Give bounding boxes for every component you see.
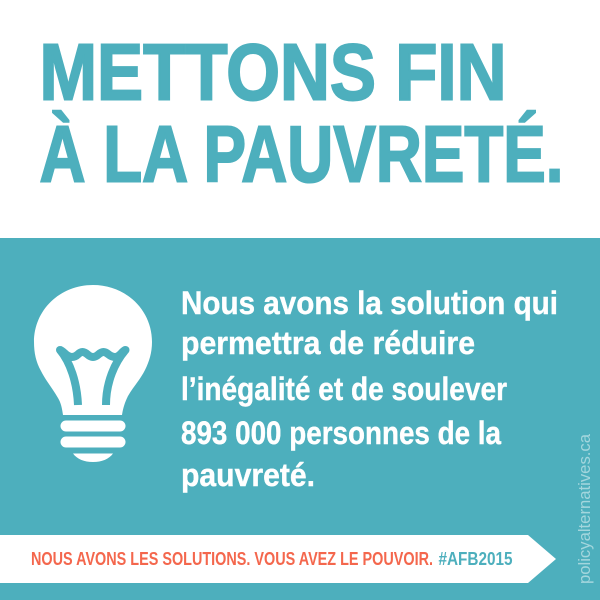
- panel: white header background: [0, 0, 600, 238]
- title: METTONS FIN: [40, 28, 506, 116]
- text block: main message: [181, 285, 558, 493]
- banner hashtag: #AFB2015: [438, 548, 512, 569]
- text block: main message: permettra de réduire: [181, 325, 475, 361]
- panel: teal body background: [0, 238, 600, 600]
- title: [40, 28, 564, 198]
- text block: main message: 893 000 personnes de la: [181, 415, 501, 451]
- banner text: NOUS AVONS LES SOLUTIONS. VOUS AVEZ LE POUVOIR.: [31, 548, 433, 569]
- text block: main message: Nous avons la solution qui: [181, 285, 558, 321]
- website credit: policyalternatives.ca: [575, 433, 594, 584]
- text block: main message: pauvreté.: [181, 457, 315, 493]
- icon: light bulb: [34, 285, 152, 462]
- text block: main message: l’inégalité et de soulever: [181, 371, 507, 407]
- banner arrow: [0, 535, 556, 583]
